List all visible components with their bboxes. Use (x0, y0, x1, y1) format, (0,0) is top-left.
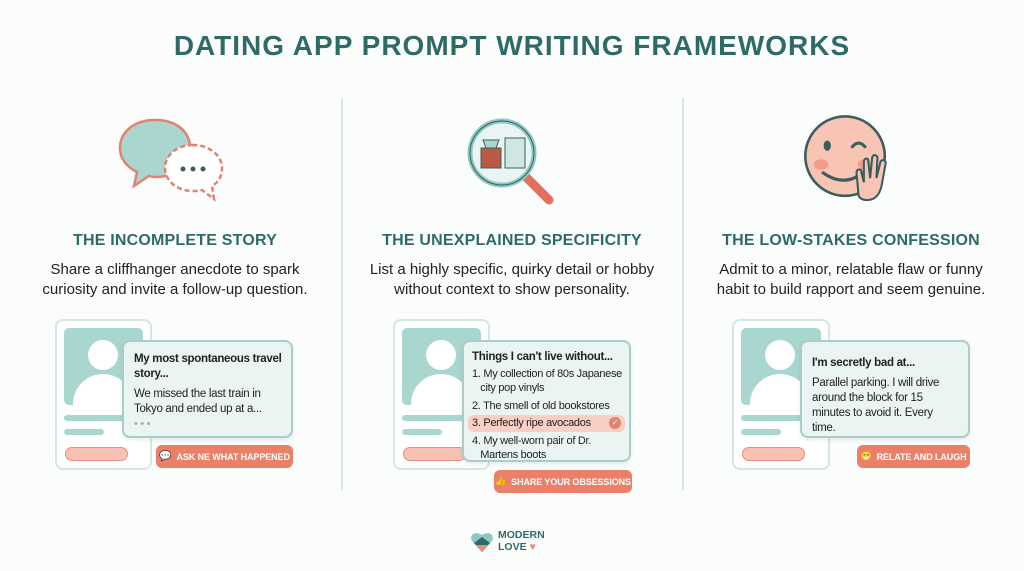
logo (471, 529, 545, 553)
prompt bubble list: 2. The smell of old bookstores (472, 400, 610, 412)
mockup: incomplete story (55, 319, 294, 470)
panel: unexplained specificity (370, 118, 654, 298)
prompt bubble (122, 340, 293, 438)
brand text: LOVE ♥ (498, 541, 536, 553)
brand text: MODERN (498, 529, 545, 541)
button: ASK NE WHAT HAPPENED (176, 452, 290, 462)
description: without context to show personality. (394, 281, 630, 298)
description (42, 261, 308, 298)
prompt bubble: • • • (134, 418, 150, 430)
prompt bubble list: Martens boots (480, 449, 546, 461)
prompt bubble list: Things I can't live without... (472, 351, 613, 363)
title: DATING APP PROMPT WRITING FRAMEWORKS (174, 30, 850, 61)
heading: THE INCOMPLETE STORY (73, 232, 277, 249)
button: RELATE AND LAUGH (877, 452, 966, 462)
prompt bubble: around the block for 15 (812, 392, 923, 404)
prompt bubble list: city pop vinyls 4. My well-worn pair of Dr. (472, 382, 591, 446)
button: 👍 (495, 476, 506, 486)
description: Share a cliffhanger anecdote to spark (50, 261, 300, 278)
panel: incomplete story (42, 118, 308, 298)
prompt bubble: minutes to avoid it. Every (812, 407, 933, 419)
prompt bubble list: ✓ (612, 418, 618, 427)
icon: winking face (804, 115, 887, 202)
description: Admit to a minor, relatable flaw or funny (719, 261, 983, 278)
prompt bubble list: 3. Perfectly ripe avocados (472, 417, 591, 429)
button: 💬 (159, 451, 172, 462)
button: SHARE YOUR OBSESSIONS (511, 476, 631, 486)
button (857, 445, 970, 468)
heading: THE LOW-STAKES CONFESSION (722, 232, 980, 249)
prompt bubble: story... (134, 368, 168, 380)
button (494, 470, 632, 493)
mockup: specificity (393, 319, 632, 493)
description: habit to build rapport and seem genuine. (717, 281, 985, 298)
prompt bubble list: 1. My collection of 80s Japanese (472, 368, 622, 380)
mockup: confession (732, 319, 970, 470)
prompt bubble: time. (812, 422, 835, 434)
button: 😁 (860, 451, 872, 461)
prompt bubble: We missed the last train in (134, 388, 261, 400)
icon: speech bubbles (118, 118, 224, 202)
icon: magnifying glass (468, 118, 554, 204)
brand text (498, 529, 545, 553)
button (156, 445, 293, 468)
prompt bubble list (462, 340, 631, 462)
icon: heart logo (471, 533, 493, 552)
panel: low-stakes confession (717, 115, 985, 298)
description (717, 261, 985, 298)
heading: THE UNEXPLAINED SPECIFICITY (382, 232, 642, 249)
description (370, 261, 654, 298)
prompt bubble: I'm secretly bad at... (812, 357, 915, 369)
prompt bubble: Parallel parking. I will drive (812, 377, 939, 389)
description: List a highly specific, quirky detail or hobby (370, 261, 654, 278)
description: curiosity and invite a follow-up question. (42, 281, 308, 298)
prompt bubble: Tokyo and ended up at a... (134, 403, 262, 415)
prompt bubble (800, 340, 970, 438)
prompt bubble: My most spontaneous travel (134, 353, 281, 365)
